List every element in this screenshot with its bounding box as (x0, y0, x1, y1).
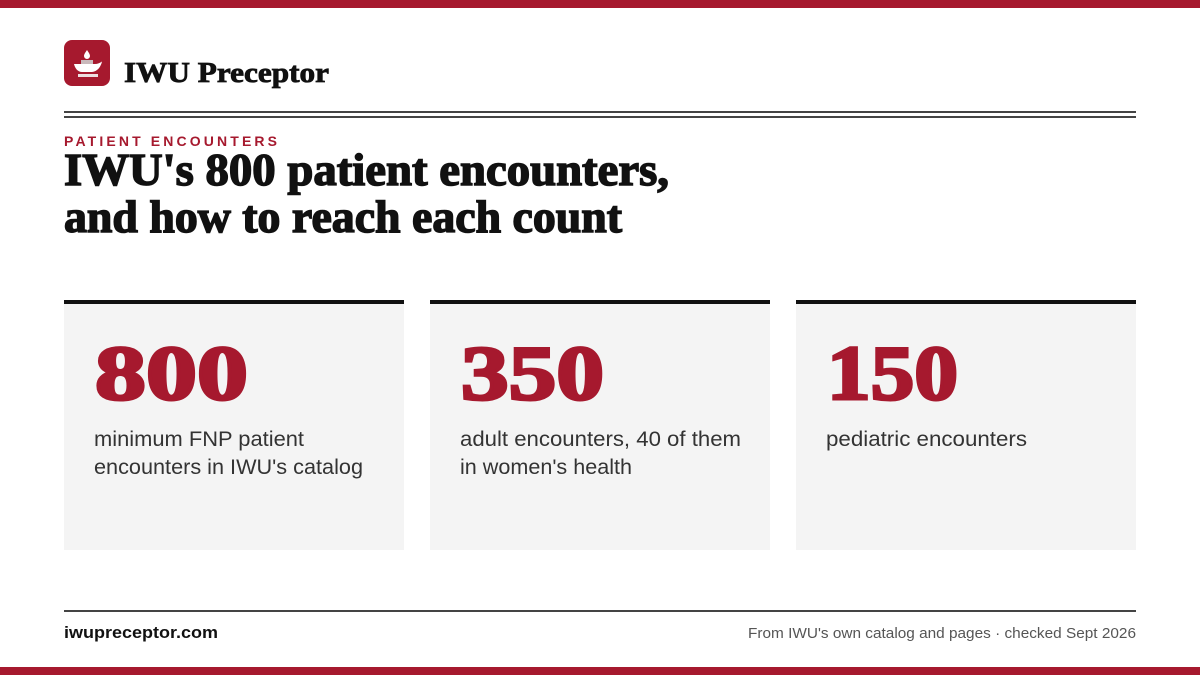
description: 800: encounters in IWU's catalog (94, 455, 363, 479)
stat: 150: 150 (827, 330, 958, 416)
stat: 800: 800 (95, 330, 248, 416)
footer source note: From IWU's own catalog and pages · checked Sept 2026 (748, 626, 1136, 642)
description: 150: pediatric encounters (826, 427, 1027, 451)
title: IWU's 800 patient encounters, (64, 144, 669, 195)
panel: 350 encounters (430, 300, 770, 550)
panel: 150 encounters (796, 300, 1136, 550)
footer site name: iwupreceptor.com (64, 623, 218, 642)
eyebrow: PATIENT ENCOUNTERS (64, 133, 277, 149)
description: 350 (460, 427, 741, 479)
icon: oil lamp (64, 40, 110, 86)
description: 800 (94, 427, 363, 479)
description: 350: in women's health (460, 455, 632, 479)
description: 350: adult encounters, 40 of them (460, 427, 741, 451)
title (64, 144, 669, 242)
title: and how to reach each count (64, 191, 623, 242)
header double rule (64, 111, 1136, 118)
brand name: IWU Preceptor (124, 58, 329, 89)
top brand bar (0, 0, 1200, 8)
logo header (64, 40, 329, 89)
panel: 800 encounters (64, 300, 404, 550)
stat: 350: 350 (461, 330, 604, 416)
description: 800: minimum FNP patient (94, 427, 304, 451)
bottom brand bar (0, 667, 1200, 675)
